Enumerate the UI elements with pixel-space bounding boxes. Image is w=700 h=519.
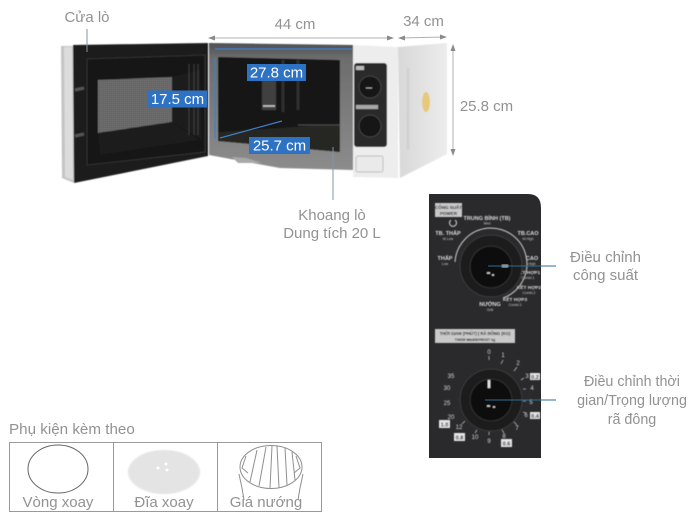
defrost weight tags: 1.0 <box>441 422 448 428</box>
power section: M.Low <box>443 237 454 241</box>
power section: High <box>528 262 536 266</box>
timer section: 20 <box>448 415 455 421</box>
accessory: turntable ring <box>23 445 94 511</box>
label: 44 cm width <box>208 16 394 40</box>
timer section: 7 <box>515 426 519 432</box>
power dial <box>455 228 527 298</box>
callout: 17.5 cm: 17.5 cm <box>151 91 204 108</box>
oven control column <box>353 45 398 178</box>
defrost weight tags <box>439 373 540 448</box>
power section: KẾT HỢP3 <box>503 296 528 303</box>
timer section: 12 <box>456 425 463 431</box>
power section: Med <box>484 222 490 226</box>
power section: CAO <box>526 256 539 262</box>
callout: power adjustment <box>488 249 641 284</box>
accessory: glass plate: Đĩa xoay <box>134 494 194 511</box>
callout: power adjustment: công suất <box>573 267 639 284</box>
timer section: 35 <box>448 374 455 380</box>
label: 34 cm depth <box>398 13 447 40</box>
callout: time and weight adjustment: rã đông <box>608 412 656 428</box>
accessory: turntable ring: Vòng xoay <box>23 494 94 511</box>
label: cavity capacity: Dung tích 20 L <box>283 225 381 242</box>
label: cavity capacity: Khoang lò <box>298 207 366 224</box>
label: 44 cm width: 44 cm <box>275 16 315 33</box>
power section: Combi.2 <box>522 291 536 295</box>
oven door <box>61 43 208 183</box>
label: door: Cửa lò <box>64 9 110 26</box>
callout: time and weight adjustment: gian/Trọng lượng <box>577 393 687 409</box>
defrost weight tags: 0.6 <box>503 442 510 448</box>
label: 34 cm depth: 34 cm <box>403 13 444 30</box>
power section: TRUNG BÌNH (TB) <box>463 214 511 222</box>
power section: THẤP <box>438 255 453 262</box>
label: 25.8 cm height <box>450 44 513 156</box>
label: door <box>64 9 110 52</box>
timer section: THỜI GIAN (PHÚT) | RÃ ĐÔNG (KG) <box>440 331 511 336</box>
timer section: 10 <box>472 435 479 441</box>
timer section: 3 <box>525 374 529 380</box>
power section: Combi.3 <box>508 303 522 307</box>
timer section: 4 <box>530 386 534 392</box>
timer section <box>435 329 540 448</box>
timer section: 9 <box>487 439 491 445</box>
callout: power adjustment: Điều chỉnh <box>570 249 641 266</box>
power section: CÔNG SUẤT <box>435 203 462 210</box>
timer section: TIMER Min/DEFROST kg <box>455 338 495 342</box>
power section: M.High <box>522 237 534 241</box>
callout: 25.7 cm: 25.7 cm <box>253 138 306 154</box>
timer section: 8 <box>502 434 506 440</box>
cavity dimension arrows <box>215 49 352 139</box>
power section: KẾT HỢP1 <box>516 269 541 276</box>
defrost weight tags: 0.8 <box>456 436 463 442</box>
defrost weight tags: 0.2 <box>531 375 539 381</box>
accessories heading: Phụ kiện kèm theo <box>9 421 135 438</box>
accessory: glass plate <box>128 450 200 511</box>
oven front window <box>209 43 353 170</box>
microwave oven <box>61 43 447 183</box>
label: 25.8 cm height: 25.8 cm <box>460 98 513 115</box>
power section: Combi.1 <box>521 276 535 280</box>
timer section: 25 <box>444 401 451 407</box>
callout: time and weight adjustment: Điều chỉnh thời <box>584 374 680 390</box>
callout: 27.8 cm: 27.8 cm <box>250 64 303 82</box>
timer section: 2 <box>516 361 520 367</box>
timer section: 5 <box>529 400 533 406</box>
accessory: grill rack: Giá nướng <box>230 494 302 511</box>
oven side panel <box>398 43 447 178</box>
timer section: 0 <box>487 350 491 356</box>
callout: time and weight adjustment <box>485 374 687 428</box>
power section: TB.CAO <box>517 231 539 237</box>
power section: Grill <box>487 308 493 312</box>
panel: control panel close-up <box>429 194 542 458</box>
accessory: grill rack <box>230 446 303 511</box>
power section: NƯỚNG <box>479 300 501 308</box>
timer dial <box>460 356 526 435</box>
power section: POWER <box>440 211 458 216</box>
power section: KẾT HỢP2 <box>517 284 542 291</box>
timer section: 30 <box>444 386 451 392</box>
power section: TB. THẤP <box>435 230 461 237</box>
panel: accessories table <box>10 442 322 512</box>
timer section: 6 <box>524 413 528 419</box>
label: cavity capacity <box>283 147 381 242</box>
power section: Low <box>442 262 449 266</box>
timer section: 1 <box>501 353 505 359</box>
power section <box>435 203 542 312</box>
defrost weight tags: 0.4 <box>531 414 540 420</box>
